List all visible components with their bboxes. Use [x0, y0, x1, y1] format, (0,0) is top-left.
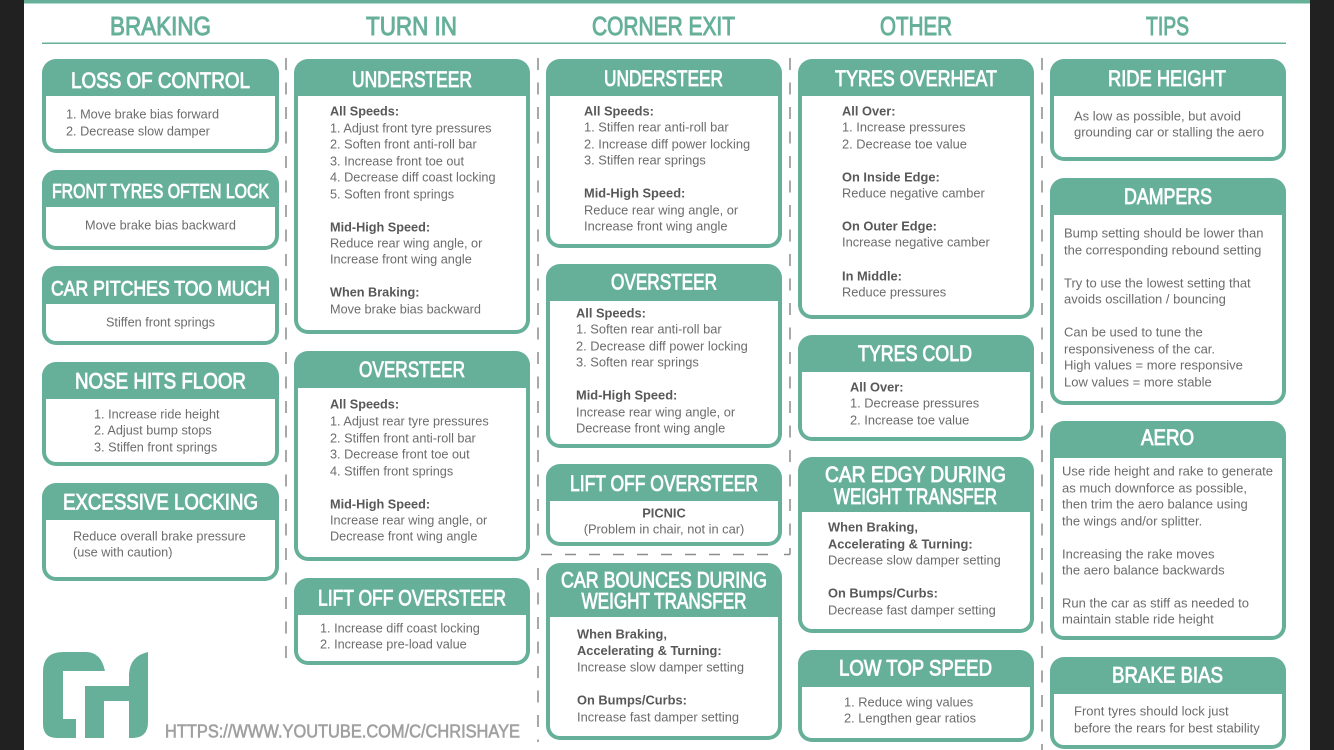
- card text: All Over:: [850, 380, 904, 394]
- card text: 2. Increase pre-load value: [320, 638, 467, 652]
- panel: car pitches too much: [42, 266, 279, 345]
- card text: [1074, 704, 1260, 736]
- card title: LIFT OFF OVERSTEER: [570, 471, 758, 496]
- card title: FRONT TYRES OFTEN LOCK: [52, 181, 270, 203]
- card text: the aero balance backwards: [1062, 562, 1225, 578]
- heading: tips: TIPS: [1146, 11, 1189, 41]
- card title: TYRES COLD: [858, 341, 972, 366]
- card text: Decrease slow damper setting: [828, 552, 1001, 568]
- panel: excessive locking: [42, 483, 279, 581]
- card text: Run the car as stiff as needed to: [1062, 596, 1249, 610]
- card text: Can be used to tune the: [1064, 324, 1203, 340]
- card text: When Braking:: [330, 286, 420, 300]
- card text: Reduce pressures: [842, 284, 946, 300]
- card text: [584, 104, 750, 234]
- card title: EXCESSIVE LOCKING: [63, 490, 258, 514]
- card text: Increase rear wing angle, or: [576, 404, 736, 420]
- card text: 1. Reduce wing values: [844, 694, 973, 710]
- panel: car edgy during weight transfer: [798, 457, 1034, 633]
- card text: Move brake bias backward: [85, 218, 236, 232]
- card title: WEIGHT TRANSFER: [582, 588, 746, 614]
- card text: Mid-High Speed:: [584, 186, 685, 200]
- card title: CAR EDGY DURING: [825, 462, 1006, 487]
- panel: corner exit oversteer: [546, 264, 782, 448]
- card text: Increase front wing angle: [330, 252, 472, 266]
- card text: On Bumps/Curbs:: [828, 586, 938, 600]
- card title: OVERSTEER: [359, 357, 465, 382]
- card text: Decrease front wing angle: [576, 420, 725, 436]
- heading: corner exit: CORNER EXIT: [592, 11, 735, 41]
- card text: 2. Increase toe value: [850, 412, 969, 428]
- card text: 3. Soften rear springs: [576, 354, 699, 370]
- card text: 3. Decrease front toe out: [330, 448, 470, 462]
- card title: RIDE HEIGHT: [1108, 66, 1226, 91]
- card text: 1. Adjust rear tyre pressures: [330, 414, 489, 428]
- card text: 2. Decrease slow damper: [66, 124, 211, 138]
- card text: 3. Stiffen front springs: [94, 440, 217, 454]
- card text: maintain stable ride height: [1062, 612, 1214, 626]
- card text: 3. Stiffen rear springs: [584, 152, 706, 168]
- card title: TYRES OVERHEAT: [835, 66, 997, 91]
- card text: the wings and/or splitter.: [1062, 514, 1202, 528]
- card title: [825, 462, 1006, 509]
- card text: Move brake bias backward: [330, 302, 481, 316]
- card text: [1074, 108, 1264, 140]
- card text: All Speeds:: [330, 398, 399, 412]
- card title: CAR PITCHES TOO MUCH: [51, 278, 270, 300]
- card text: [73, 530, 246, 560]
- card text: (Problem in chair, not in car): [584, 522, 744, 536]
- card text: 2. Stiffen front anti-roll bar: [330, 432, 477, 446]
- card text: 4. Stiffen front springs: [330, 464, 453, 478]
- card text: 1. Increase diff coast locking: [320, 622, 480, 636]
- card title: UNDERSTEER: [352, 67, 472, 92]
- card text: On Inside Edge:: [842, 170, 940, 184]
- card text: 1. Stiffen rear anti-roll bar: [584, 120, 729, 134]
- card text: PICNIC: [642, 506, 686, 520]
- card text: All Speeds:: [576, 306, 646, 320]
- card text: 1. Increase pressures: [842, 120, 966, 134]
- card text: As low as possible, but avoid: [1074, 108, 1241, 124]
- card text: Decrease front wing angle: [330, 530, 477, 544]
- panel: turn in lift off oversteer: [294, 578, 530, 665]
- card text: High values = more responsive: [1064, 358, 1243, 372]
- panel: aero: [1050, 421, 1286, 640]
- card title: OVERSTEER: [611, 270, 717, 294]
- card text: Increasing the rake moves: [1062, 546, 1215, 562]
- card text: [330, 398, 489, 544]
- card text: Increase slow damper setting: [577, 660, 744, 674]
- card title: LIFT OFF OVERSTEER: [318, 586, 506, 610]
- panel: nose hits floor: [42, 362, 279, 466]
- card title: LOSS OF CONTROL: [71, 68, 250, 93]
- panel: ride height: [1050, 59, 1286, 161]
- card text: (use with caution): [73, 546, 172, 560]
- card text: [330, 104, 496, 316]
- card title: LOW TOP SPEED: [839, 656, 992, 680]
- card text: Mid-High Speed:: [330, 498, 430, 512]
- panel: low top speed: [798, 650, 1034, 742]
- card text: On Bumps/Curbs:: [577, 692, 687, 708]
- card text: [584, 506, 744, 536]
- card text: [844, 694, 976, 726]
- card text: 1. Decrease pressures: [850, 396, 979, 410]
- card text: 2. Adjust bump stops: [94, 424, 212, 438]
- card title: UNDERSTEER: [604, 66, 723, 91]
- card text: [828, 520, 1001, 618]
- card text: 1. Adjust front tyre pressures: [330, 122, 492, 136]
- card title: NOSE HITS FLOOR: [75, 368, 246, 394]
- card text: grounding car or stalling the aero: [1074, 124, 1264, 140]
- logo: CH: [43, 652, 148, 738]
- panel: tyres overheat: [798, 59, 1034, 319]
- card text: Low values = more stable: [1064, 374, 1212, 390]
- card text: Reduce negative camber: [842, 186, 986, 200]
- card text: Stiffen front springs: [106, 316, 215, 330]
- card text: [1064, 226, 1263, 390]
- card text: When Braking,: [577, 626, 667, 642]
- card text: 2. Increase diff power locking: [584, 136, 750, 152]
- card title: BRAKE BIAS: [1112, 662, 1223, 688]
- card text: [850, 380, 979, 428]
- card text: Increase negative camber: [842, 234, 991, 250]
- card text: All Over:: [842, 104, 896, 118]
- panel: corner exit understeer: [546, 59, 782, 248]
- card text: Bump setting should be lower than: [1064, 226, 1263, 240]
- card title: CAR BOUNCES DURING: [561, 568, 767, 592]
- card text: 1. Increase ride height: [94, 408, 220, 422]
- card text: Accelerating & Turning:: [577, 643, 722, 658]
- panel: front tyres often lock: [42, 170, 279, 250]
- card text: Try to use the lowest setting that: [1064, 276, 1251, 290]
- card text: as much downforce as possible,: [1062, 480, 1247, 496]
- card text: In Middle:: [842, 268, 902, 284]
- panel: corner exit lift off oversteer: [546, 464, 782, 546]
- card text: 2. Lengthen gear ratios: [844, 710, 976, 726]
- card text: Use ride height and rake to generate: [1062, 464, 1273, 478]
- panel: brake bias: [1050, 657, 1286, 749]
- card text: 2. Decrease toe value: [842, 136, 967, 152]
- card text: 3. Increase front toe out: [330, 154, 464, 168]
- card text: 5. Soften front springs: [330, 188, 454, 202]
- panel: loss of control: [42, 59, 279, 153]
- card text: Increase front wing angle: [584, 218, 728, 234]
- card text: 4. Decrease diff coast locking: [330, 170, 496, 184]
- card text: then trim the aero balance using: [1062, 496, 1248, 512]
- card title: DAMPERS: [1124, 184, 1212, 209]
- panel: tyres cold: [798, 335, 1034, 441]
- heading: turn in: TURN IN: [366, 11, 457, 41]
- card text: avoids oscillation / bouncing: [1064, 292, 1226, 306]
- card text: [577, 626, 744, 724]
- card text: [576, 306, 748, 436]
- card text: before the rears for best stability: [1074, 720, 1260, 736]
- heading: other: OTHER: [880, 11, 952, 41]
- card text: Reduce rear wing angle, or: [584, 202, 739, 218]
- card text: Accelerating & Turning:: [828, 536, 973, 552]
- card text: the corresponding rebound setting: [1064, 242, 1261, 258]
- card text: All Speeds:: [330, 104, 399, 118]
- card text: [94, 408, 220, 454]
- card text: Reduce rear wing angle, or: [330, 236, 483, 250]
- card text: 2. Soften front anti-roll bar: [330, 138, 477, 152]
- card text: [842, 104, 991, 300]
- panel: dampers: [1050, 178, 1286, 405]
- card text: [320, 622, 480, 652]
- panel: turn in oversteer: [294, 351, 530, 561]
- card text: When Braking,: [828, 520, 918, 534]
- card text: Mid-High Speed:: [330, 220, 430, 234]
- card text: Increase rear wing angle, or: [330, 514, 488, 528]
- card text: Mid-High Speed:: [576, 388, 677, 402]
- card title: WEIGHT TRANSFER: [834, 484, 997, 509]
- card text: [1062, 464, 1273, 626]
- card title: [561, 568, 767, 614]
- card text: Increase fast damper setting: [577, 710, 739, 724]
- card text: On Outer Edge:: [842, 218, 937, 234]
- card text: Reduce overall brake pressure: [73, 530, 246, 544]
- panel: car bounces during weight transfer: [546, 563, 782, 740]
- card text: Decrease fast damper setting: [828, 602, 996, 618]
- panel: turn in understeer: [294, 59, 530, 334]
- website url: HTTPS://WWW.YOUTUBE.COM/C/CHRISHAYE: [165, 722, 520, 742]
- card title: AERO: [1141, 425, 1194, 450]
- card text: responsiveness of the car.: [1064, 342, 1215, 356]
- card text: Front tyres should lock just: [1074, 704, 1229, 718]
- card text: 1. Move brake bias forward: [66, 108, 219, 122]
- heading: braking: BRAKING: [110, 11, 211, 41]
- card text: 2. Decrease diff power locking: [576, 338, 748, 354]
- card text: [66, 108, 219, 138]
- card text: 1. Soften rear anti-roll bar: [576, 322, 722, 336]
- card text: All Speeds:: [584, 104, 654, 118]
